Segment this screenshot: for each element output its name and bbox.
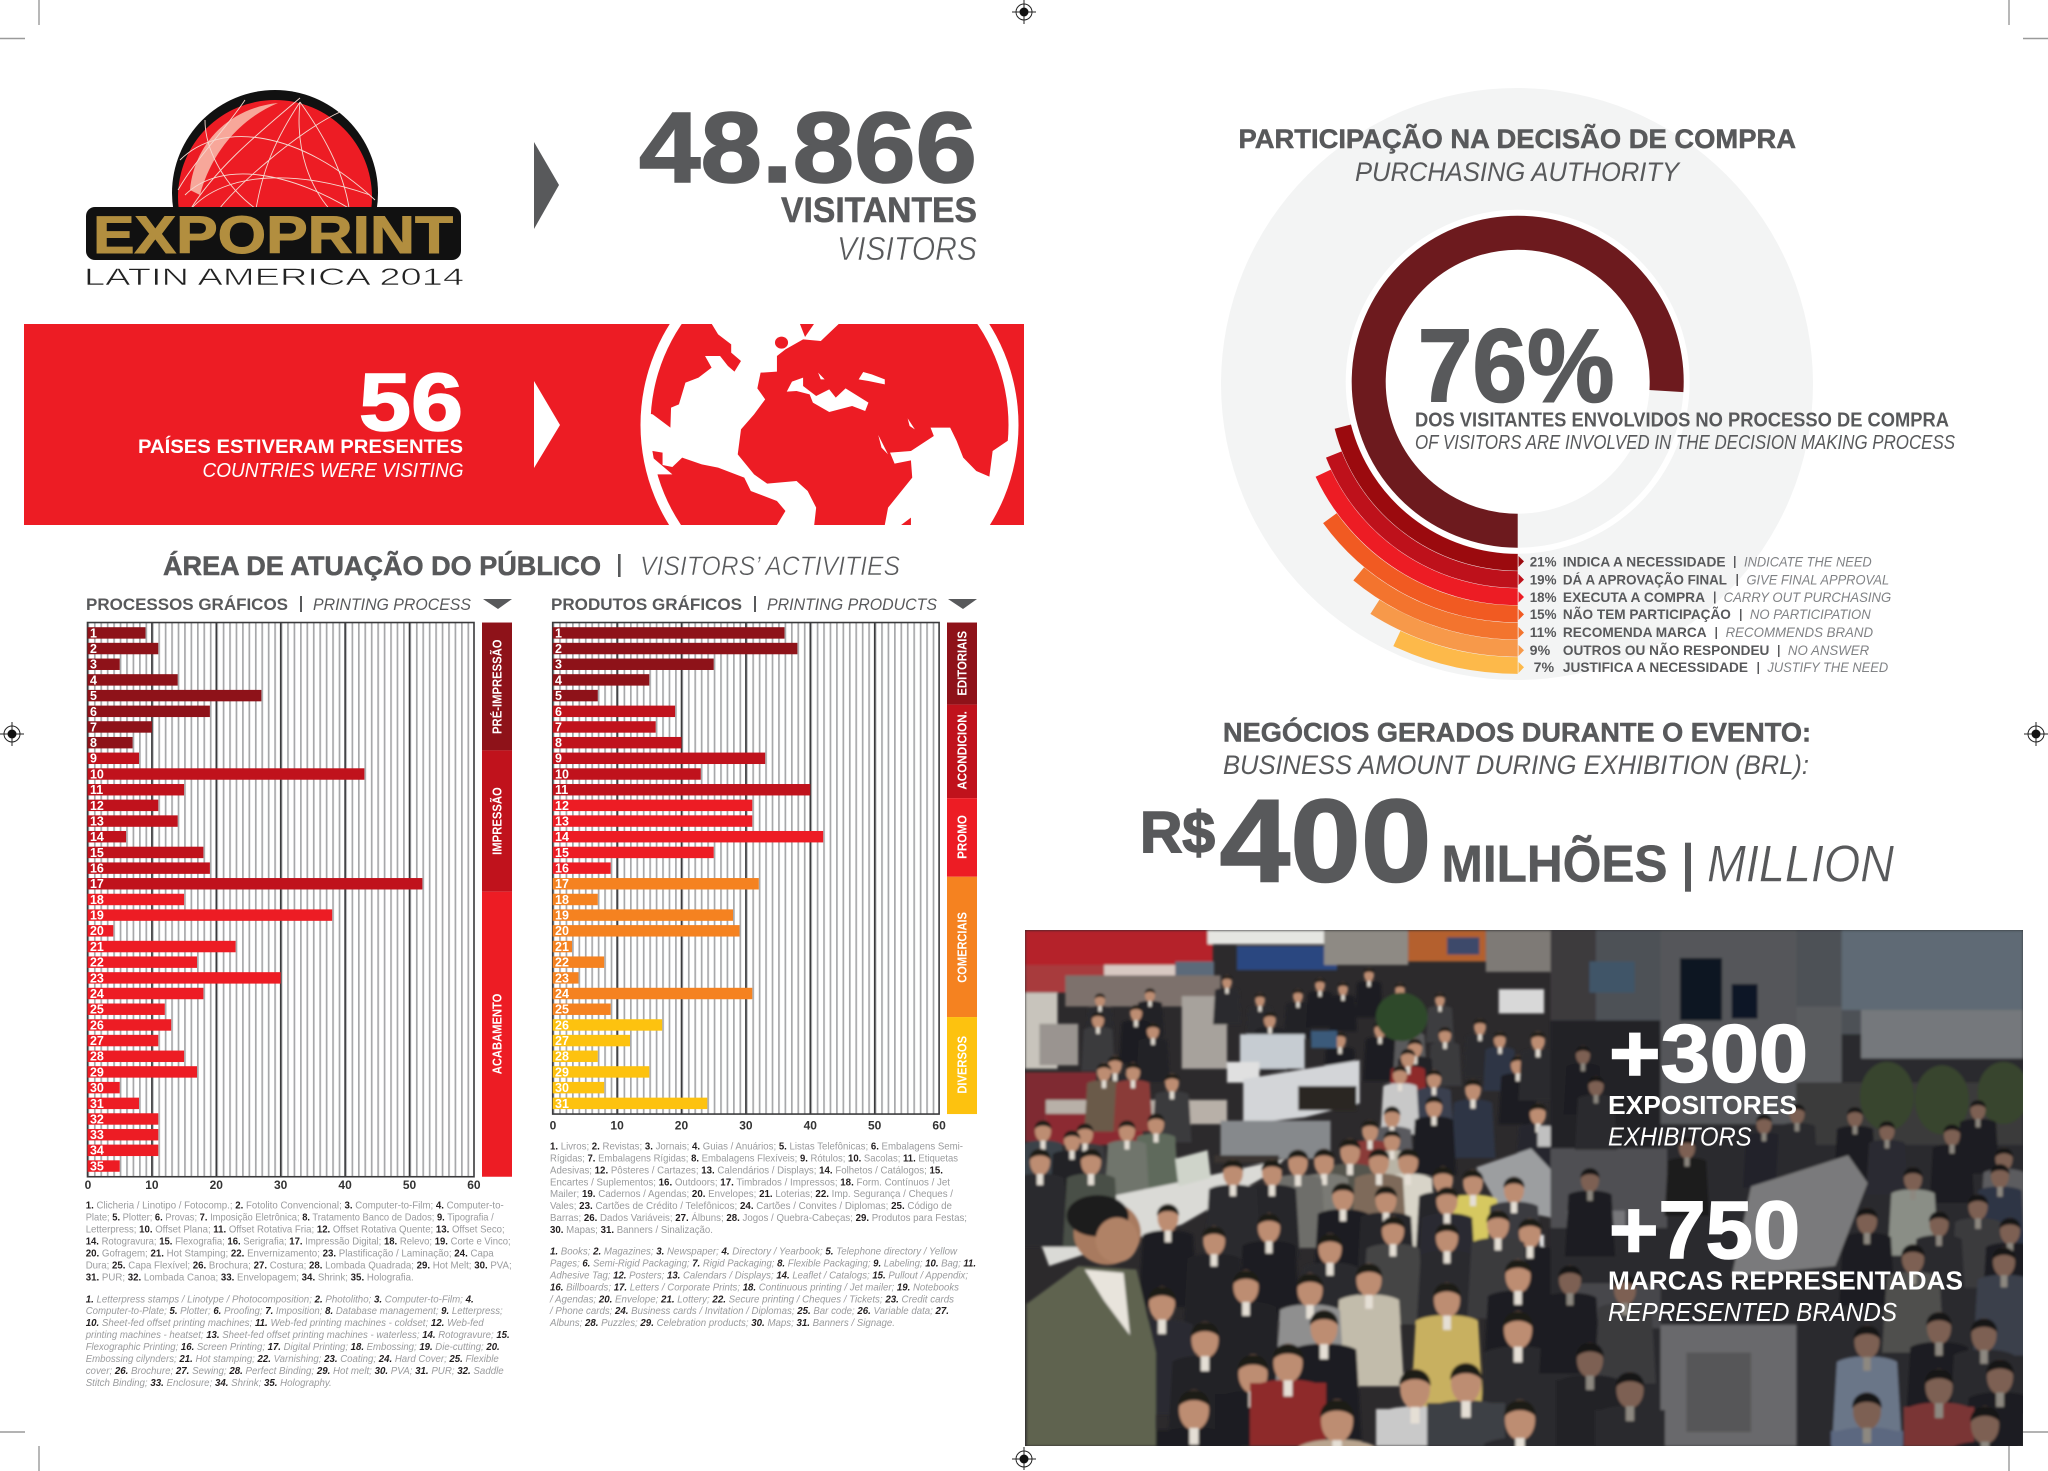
bar chart: printing process: 31 bbox=[90, 1097, 104, 1111]
bar chart: printing products: 19 bbox=[555, 909, 569, 923]
legend: purchasing authority: EXECUTA A COMPRA bbox=[1563, 589, 1705, 605]
category strip: printing process bbox=[482, 623, 512, 1177]
bar chart: printing process: 6 bbox=[90, 705, 97, 719]
heading: purchasing authority: PARTICIPAÇÃO NA DECISÃO DE COMPRA bbox=[1238, 123, 1796, 154]
bar chart: printing products: 16 bbox=[555, 862, 569, 876]
text block: process legend english: 10. Sheet-fed offset printing machines; 11. Web-fed printing machines - coldset; 12. Web-fed bbox=[86, 1317, 485, 1329]
category strip: printing products bbox=[947, 623, 977, 1114]
heading: visitors' activities bbox=[163, 550, 900, 581]
legend: purchasing authority: JUSTIFY THE NEED bbox=[1766, 659, 1888, 675]
text block: process legend portuguese: 1. Clicheria / Linotipo / Fotocomp.; 2. Fotolito Convencional; 3. Computer-to-Film; 4. Computer-to- bbox=[86, 1200, 504, 1212]
legend: purchasing authority: INDICA A NECESSIDADE bbox=[1563, 554, 1726, 570]
bar chart: printing process: 25 bbox=[90, 1003, 104, 1017]
text block: process legend english: 1. Letterpress stamps / Linotype / Photocomposition; 2. Photolitho; 3. Computer-to-Film; 4. bbox=[86, 1293, 474, 1305]
bar chart: printing process: 16 bbox=[90, 862, 104, 876]
category strip: printing products: PROMO bbox=[955, 815, 970, 859]
legend: purchasing authority bbox=[1518, 554, 1891, 675]
text block: products legend portuguese: Rígidas; 7. Embalagens Rígidas; 8. Embalagens Flexíveis; 9. Rótulos; 10. Sacolas; 11. Etiquetas bbox=[550, 1152, 958, 1164]
bar chart: printing process: 26 bbox=[90, 1018, 104, 1032]
text block: process legend english: Flexographic Printing; 16. Screen Printing; 17. Digital Printing; 18. Embossing; 19. Die-cutting; 20. bbox=[86, 1341, 500, 1353]
stat: R$400 million: MILHÕES bbox=[1442, 835, 1668, 894]
bar chart: printing process: 2 bbox=[90, 642, 97, 656]
logo wordmark: EXPOPRINT bbox=[93, 206, 453, 265]
bar chart: printing products: 5 bbox=[555, 689, 562, 703]
text block: process legend portuguese: Plate; 5. Plotter; 6. Provas; 7. Imposição Eletrônica; 8. Tratamento Banco de Dados; 9. Tipografia / bbox=[86, 1212, 494, 1224]
text block: products legend english: Adhesive Tag; 12. Posters; 13. Calendars / Displays; 14. Leaflet / Catalogs; 15. Pullout / Appendix; bbox=[549, 1270, 968, 1282]
logo subtitle: LATIN AMERICA 2014 bbox=[84, 264, 464, 291]
text block: process legend english: Computer-to-Plate; 5. Plotter; 6. Proofing; 7. Imposition; 8. Database management; 9. Letterpress; bbox=[86, 1305, 503, 1317]
heading: business amount: NEGÓCIOS GERADOS DURANTE O EVENTO: bbox=[1223, 717, 1811, 748]
bar chart: printing process: 14 bbox=[90, 830, 104, 844]
bar chart: printing products: 20 bbox=[555, 924, 569, 938]
bar chart: printing products: 15 bbox=[555, 846, 569, 860]
heading: business amount: BUSINESS AMOUNT DURING EXHIBITION (BRL): bbox=[1223, 750, 1809, 780]
main arc 76% bbox=[1369, 233, 1667, 531]
legend: purchasing authority: NO PARTICIPATION bbox=[1750, 606, 1872, 622]
heading: printing process: PROCESSOS GRÁFICOS bbox=[86, 595, 288, 614]
text block: process legend english: printing machines - heatset; 13. Sheet-fed offset printing machines - waterless; 14. Rotogravure; 15. bbox=[85, 1329, 510, 1341]
text block: process legend portuguese: Dura; 25. Capa Flexível; 26. Brochura; 27. Costura; 28. Lombada Quadrada; 29. Hot Melt; 30. PVA; bbox=[86, 1260, 512, 1272]
bar chart: printing process: 28 bbox=[90, 1050, 104, 1064]
label visitantes: VISITANTES bbox=[781, 191, 977, 230]
bar chart: printing products bbox=[550, 623, 946, 1132]
stat: R$400 million: 400 bbox=[1220, 776, 1432, 908]
bar chart: printing products: 22 bbox=[555, 956, 569, 970]
bar chart: printing process: 8 bbox=[90, 736, 97, 750]
bar chart: printing products: 29 bbox=[555, 1065, 569, 1079]
text block: products legend english: Pages; 6. Semi-Rigid Packaging; 7. Rigid Packaging; 8. Flexible Packaging; 9. Labeling; 10. Bag; 11. bbox=[550, 1257, 976, 1269]
text block: process legend english bbox=[85, 1293, 510, 1389]
legend: purchasing authority: JUSTIFICA A NECESSIDADE bbox=[1563, 659, 1748, 675]
heading: printing products: PRINTING PRODUCTS bbox=[767, 595, 938, 614]
bar chart: printing process: 13 bbox=[90, 815, 104, 828]
text block: products legend english: 1. Books; 2. Magazines; 3. Newspaper; 4. Directory / Yearbook; 5. Telephone directory / Yellow bbox=[550, 1245, 958, 1257]
heading: printing process: PRINTING PROCESS bbox=[313, 595, 472, 614]
bar chart: printing process: 33 bbox=[90, 1128, 104, 1142]
text block: products legend portuguese: 1. Livros; 2. Revistas; 3. Jornais; 4. Guias / Anuários; 5. Listas Telefônicas; 6. Embalagens Semi- bbox=[550, 1140, 963, 1152]
bar chart: printing process: 1 bbox=[90, 626, 97, 640]
right crowd bbox=[1539, 1046, 2038, 1384]
stat: brands bbox=[1608, 1200, 1962, 1322]
bar chart: printing products: 13 bbox=[555, 815, 569, 828]
heading: purchasing authority: PURCHASING AUTHORITY bbox=[1355, 157, 1681, 187]
stat: exhibitors: EXPOSITORES bbox=[1608, 1090, 1797, 1120]
legend: purchasing authority: 21% bbox=[1530, 554, 1557, 570]
bar chart: printing process: 24 bbox=[90, 987, 104, 1001]
text block: products legend portuguese: Encartes / Suplementos; 16. Outdoors; 17. Timbrados / Impressos; 18. Form. Contínuos / Jet bbox=[550, 1176, 950, 1188]
text block: products legend portuguese: 30. Mapas; 31. Banners / Sinalização. bbox=[550, 1224, 713, 1236]
fan of sub arcs bbox=[1323, 427, 1518, 666]
text block: products legend portuguese: Adesivas; 12. Pôsteres / Cartazes; 13. Calendários / Displays; 14. Folhetos / Catálogos; 15. bbox=[550, 1164, 943, 1176]
bar chart: printing products: 26 bbox=[555, 1018, 569, 1032]
stat: exhibitors bbox=[1608, 1024, 1806, 1146]
arrow: white bbox=[534, 381, 560, 468]
bar chart: printing process: 60 bbox=[467, 1178, 481, 1192]
counter and equipment bbox=[1036, 1126, 1576, 1266]
bar chart: printing products: 20 bbox=[675, 1119, 689, 1132]
text block: process legend portuguese: 14. Rotogravura; 15. Flexografia; 16. Serigrafia; 17. Impressão Digital; 18. Relevo; 19. Corte e Vinco; bbox=[86, 1236, 511, 1248]
bar chart: printing process: 10 bbox=[145, 1178, 159, 1192]
bar chart: printing process: 30 bbox=[274, 1178, 288, 1192]
bar chart: printing process: 11 bbox=[90, 783, 103, 797]
bar chart: printing products: 2 bbox=[555, 642, 562, 656]
bar chart: printing products: 12 bbox=[555, 799, 569, 813]
legend: purchasing authority: 7% bbox=[1534, 659, 1555, 675]
text block: process legend portuguese bbox=[86, 1200, 512, 1284]
bar chart: printing process: 7 bbox=[90, 720, 97, 734]
bar chart: printing process: 22 bbox=[90, 956, 104, 970]
legend: purchasing authority: 11% bbox=[1530, 624, 1557, 640]
bar chart: printing products: 21 bbox=[555, 940, 569, 954]
bar chart: printing products: 30 bbox=[739, 1119, 753, 1132]
bar chart: printing process: 34 bbox=[90, 1144, 104, 1158]
text block: products legend portuguese: Mailer; 19. Cadernos / Agendas; 20. Envelopes; 21. Loterias; 22. Imp. Segurança / Cheques / bbox=[550, 1188, 953, 1200]
label paises: PAÍSES ESTIVERAM PRESENTES bbox=[138, 436, 463, 458]
stat: visitors bbox=[639, 92, 977, 267]
heading: printing products bbox=[551, 595, 977, 614]
heading: printing products: PRODUTOS GRÁFICOS bbox=[551, 595, 742, 614]
bar chart: printing process: 10 bbox=[90, 767, 104, 781]
number 56: 56 bbox=[359, 357, 463, 448]
stat: R$400 million: MILLION bbox=[1707, 836, 1894, 894]
bar chart: printing products: 8 bbox=[555, 736, 562, 750]
right machines bbox=[1661, 1155, 1868, 1446]
text block: products legend english: / Agendas; 20. Envelope; 21. Lottery; 22. Secure printing / Cheques / Tickets; 23. Credit cards bbox=[549, 1293, 955, 1305]
bar chart: printing process: 35 bbox=[90, 1160, 104, 1173]
photo: crowd at the exhibition bbox=[1012, 920, 2038, 1466]
logo: Expoprint Latin America 2014 bbox=[84, 90, 464, 296]
bar chart: printing products: 0 bbox=[550, 1119, 557, 1132]
text block: process legend english: cover; 26. Brochure; 27. Sewing; 28. Perfect Binding; 29. Hot melt; 30. PVA; 31. PUR; 32. Saddle bbox=[86, 1365, 504, 1377]
stat: R$400 million: R$ bbox=[1140, 801, 1215, 866]
stat: brands: REPRESENTED BRANDS bbox=[1608, 1297, 1898, 1327]
stat: brands: MARCAS REPRESENTADAS bbox=[1608, 1266, 1963, 1296]
bar chart: printing products: 4 bbox=[555, 673, 562, 687]
legend: purchasing authority: OUTROS OU NÃO RESPONDEU bbox=[1563, 641, 1769, 658]
icon: red globe bbox=[172, 90, 378, 207]
bar chart: printing products: 28 bbox=[555, 1050, 569, 1064]
near crowd bbox=[1012, 1138, 1561, 1466]
bar chart: printing process: 5 bbox=[90, 689, 97, 703]
legend: purchasing authority: 19% bbox=[1530, 572, 1557, 588]
bar chart: printing products: 17 bbox=[555, 877, 569, 891]
bar chart: printing products: 31 bbox=[555, 1097, 569, 1111]
heading: printing process bbox=[86, 595, 512, 614]
right darkened scene bbox=[1551, 920, 2029, 1460]
bar chart: printing process: 32 bbox=[90, 1112, 104, 1126]
stat: R$400 million bbox=[1140, 776, 1894, 908]
icon: world globe bbox=[640, 324, 1018, 525]
heading: visitors' activities: ÁREA DE ATUAÇÃO DO PÚBLICO bbox=[163, 550, 601, 581]
stat: 76%: 76% bbox=[1418, 308, 1614, 424]
bar chart: printing products: 14 bbox=[555, 830, 569, 844]
bar chart: printing products: 30 bbox=[555, 1081, 569, 1095]
legend: purchasing authority: INDICATE THE NEED bbox=[1744, 554, 1872, 570]
stat: 76%: DOS VISITANTES ENVOLVIDOS NO PROCESSO DE COMPRA bbox=[1415, 410, 1949, 432]
stat: 76%: OF VISITORS ARE INVOLVED IN THE DECISION MAKING PROCESS bbox=[1415, 432, 1956, 454]
heading: purchasing authority bbox=[1238, 123, 1796, 187]
text block: products legend portuguese: Barras; 26. Dados Variáveis; 27. Álbuns; 28. Jogos / Quebra-Cabeças; 29. Produtos para Festas; bbox=[550, 1211, 967, 1224]
heading: business amount bbox=[1223, 717, 1811, 780]
text block: products legend english: Albuns; 28. Puzzles; 29. Celebration products; 30. Maps; 31. Banners / Signage. bbox=[549, 1317, 895, 1329]
bar chart: printing process: 17 bbox=[90, 877, 104, 891]
bar chart: printing process: 30 bbox=[90, 1081, 104, 1095]
bar chart: printing products: 50 bbox=[868, 1119, 882, 1132]
category strip: printing process: PRÉ-IMPRESSÃO bbox=[489, 639, 505, 734]
booth machines bbox=[1221, 989, 1544, 1159]
bar chart: printing process: 12 bbox=[90, 799, 104, 813]
stat: exhibitors: +300 bbox=[1609, 1008, 1808, 1100]
bar chart: printing process: 4 bbox=[90, 673, 97, 687]
text block: products legend english bbox=[549, 1245, 976, 1329]
category strip: printing process: IMPRESSÃO bbox=[489, 787, 505, 855]
label countries: COUNTRIES WERE VISITING bbox=[202, 460, 464, 482]
legend: purchasing authority: NÃO TEM PARTICIPAÇÃO bbox=[1563, 605, 1731, 622]
text block: process legend english: Embossing cilynders; 21. Hot stamping; 22. Varnishing; 23. Coating; 24. Hard Cover; 25. Flexible bbox=[86, 1353, 499, 1365]
bar chart: printing process: 27 bbox=[90, 1034, 104, 1048]
right foreground crowd bbox=[1575, 1311, 2023, 1446]
panel: countries band bbox=[24, 324, 1024, 525]
bar chart: printing process: 15 bbox=[90, 846, 104, 860]
bar chart: printing products: 60 bbox=[932, 1119, 946, 1132]
stat: 76% bbox=[1415, 308, 1956, 454]
bar chart: printing products: 27 bbox=[555, 1034, 569, 1048]
text block: process legend portuguese: Letterpress; 10. Offset Plana; 11. Offset Rotativa Fria; 12. Offset Rotativa Quente; 13. Offset Seco; bbox=[86, 1224, 505, 1236]
bar chart: printing products: 23 bbox=[555, 971, 569, 985]
legend: purchasing authority: DÁ A APROVAÇÃO FINAL bbox=[1563, 571, 1727, 588]
donut chart: purchasing authority bbox=[1221, 88, 1813, 680]
bar chart: printing products: 11 bbox=[555, 783, 568, 797]
text block: products legend portuguese bbox=[550, 1140, 967, 1236]
text block: products legend portuguese: Vales; 23. Cartões de Crédito / Telefônicos; 24. Cartões / Convites / Diplomas; 25. Código de bbox=[550, 1200, 952, 1212]
bar chart: printing products: 40 bbox=[804, 1119, 817, 1132]
bar chart: printing process: 29 bbox=[90, 1065, 104, 1079]
bar chart: printing process: 18 bbox=[90, 893, 104, 907]
bar chart: printing products: 25 bbox=[555, 1003, 569, 1017]
legend: purchasing authority: NO ANSWER bbox=[1788, 642, 1869, 658]
legend: purchasing authority: 9% bbox=[1530, 642, 1551, 658]
arrow: visitors bbox=[534, 142, 559, 229]
bar chart: printing process: 19 bbox=[90, 909, 104, 923]
heading: visitors' activities: VISITORS’ ACTIVITIES bbox=[640, 551, 900, 581]
bar chart: printing process: 3 bbox=[90, 658, 97, 672]
category strip: printing products: DIVERSOS bbox=[955, 1036, 970, 1094]
bar chart: printing process: 23 bbox=[90, 971, 104, 985]
text block: process legend portuguese: 31. PUR; 32. Lombada Canoa; 33. Envelopagem; 34. Shrink; 35. Holografia. bbox=[86, 1272, 414, 1284]
legend: purchasing authority: GIVE FINAL APPROVAL bbox=[1746, 572, 1889, 588]
bar chart: printing process bbox=[85, 623, 481, 1192]
category strip: printing products: EDITORIAIS bbox=[955, 631, 970, 696]
legend: purchasing authority: RECOMMENDS BRAND bbox=[1726, 624, 1873, 640]
bar chart: printing process: 21 bbox=[90, 940, 104, 954]
bar chart: printing process: 50 bbox=[403, 1178, 417, 1192]
bar chart: printing products: 6 bbox=[555, 705, 562, 719]
stat: brands: +750 bbox=[1609, 1185, 1800, 1276]
text block: products legend english: 16. Billboards; 17. Letters / Corporate Prints; 18. Continuous printing / Jet mailer; 19. Notebooks bbox=[550, 1281, 960, 1293]
legend: purchasing authority: 15% bbox=[1530, 606, 1557, 622]
text block: products legend english: / Phone cards; 24. Business cards / Invitation / Diplomas; 25. Bar code; 26. Variable data; 27. bbox=[549, 1305, 949, 1317]
bar chart: printing process: 0 bbox=[85, 1178, 92, 1192]
bar chart: printing products: 7 bbox=[555, 720, 562, 734]
legend: purchasing authority: CARRY OUT PURCHASING bbox=[1724, 589, 1891, 605]
bar chart: printing products: 10 bbox=[555, 767, 569, 781]
bar chart: printing products: 9 bbox=[555, 752, 562, 766]
text block: process legend english: Stitch Binding; 33. Enclosure; 34. Shrink; 35. Holography. bbox=[86, 1377, 332, 1389]
bar chart: printing process: 9 bbox=[90, 752, 97, 766]
label visitors: VISITORS bbox=[837, 230, 977, 267]
category strip: printing process: ACABAMENTO bbox=[490, 993, 505, 1074]
middle crowd bbox=[1021, 1032, 1560, 1209]
man in olive jacket bbox=[1026, 1195, 1156, 1446]
category strip: printing products: ACONDICION. bbox=[955, 711, 970, 790]
distant crowd bbox=[1081, 968, 1517, 1091]
legend: purchasing authority: RECOMENDA MARCA bbox=[1563, 624, 1707, 640]
bar chart: printing products: 1 bbox=[555, 626, 562, 640]
photo scene bbox=[1012, 920, 2038, 1466]
bar chart: printing products: 24 bbox=[555, 987, 569, 1001]
text block: process legend portuguese: 20. Gofragem; 21. Hot Stamping; 22. Envernizamento; 23. Plastificação / Laminação; 24. Capa bbox=[86, 1248, 494, 1260]
category strip: printing products: COMERCIAIS bbox=[955, 912, 970, 983]
bar chart: printing process: 40 bbox=[338, 1178, 352, 1192]
bar chart: printing products: 18 bbox=[555, 893, 569, 907]
legend: purchasing authority: 18% bbox=[1530, 589, 1557, 605]
bar chart: printing process: 20 bbox=[210, 1178, 223, 1192]
bar chart: printing products: 10 bbox=[610, 1119, 624, 1132]
logo band bbox=[86, 207, 461, 260]
stat: exhibitors: EXHIBITORS bbox=[1608, 1122, 1752, 1152]
bar chart: printing products: 3 bbox=[555, 658, 562, 672]
number 48.866: 48.866 bbox=[639, 92, 977, 204]
bar chart: printing process: 20 bbox=[90, 924, 104, 938]
